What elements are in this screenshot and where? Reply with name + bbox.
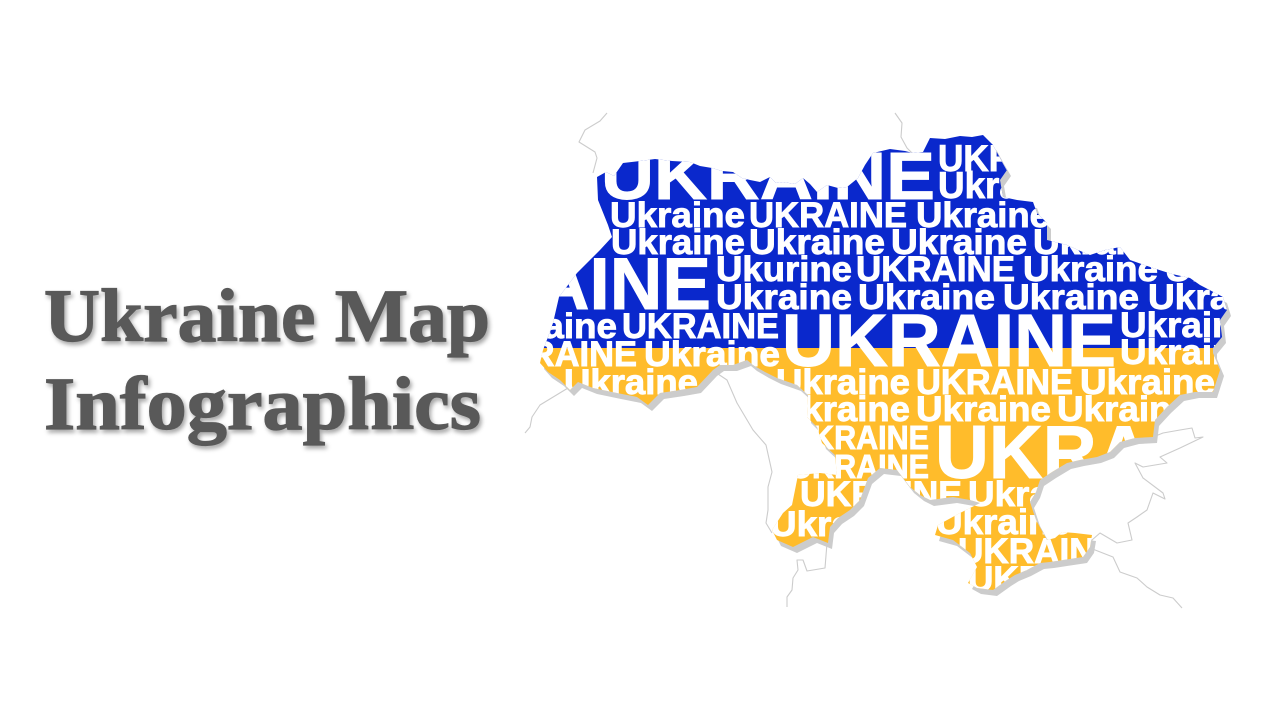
word cloud text: Ukraine [1033, 223, 1169, 262]
word cloud text: UKRAINE [935, 410, 1275, 494]
word cloud text: UKRAINE [790, 419, 929, 456]
title [44, 275, 490, 446]
word cloud text: UKRAINE [856, 250, 1015, 289]
word cloud text: Ukraine [776, 390, 910, 429]
word cloud text: UKRAINE [622, 307, 779, 346]
word cloud text: Ukraine [564, 363, 698, 402]
map shadow [544, 141, 1231, 596]
word cloud text: UKRAINE [480, 335, 637, 374]
word cloud text: UKRAINE [958, 532, 1118, 571]
word cloud text: Ukraine [891, 223, 1027, 262]
word cloud text: Ukraine [1003, 278, 1139, 317]
word cloud text: Ukraine [482, 307, 617, 346]
word cloud text: UKRAINE [800, 475, 962, 514]
yellow stripe [540, 348, 1220, 590]
word cloud text: UKRAINE [938, 138, 1098, 179]
word cloud text: UKRAINE [379, 244, 711, 325]
word cloud text: Ukraine [1120, 333, 1255, 372]
word cloud text: Ukraine [610, 196, 745, 235]
word cloud text: Ukraine [916, 196, 1050, 235]
word cloud text: Ukraine [776, 363, 910, 402]
word cloud text: Ukraine [936, 503, 1071, 542]
word cloud text: UKRAINE [601, 139, 935, 214]
title: Infographics [44, 363, 481, 446]
word cloud text: Ukraine [644, 335, 780, 374]
title: Ukraine Map [44, 275, 490, 358]
word cloud text: Ukraine [1120, 306, 1255, 345]
word cloud text: Ukraine [716, 278, 852, 317]
word cloud text: Ukurine [716, 250, 852, 289]
blue stripe [544, 135, 1227, 348]
word cloud text: Ukraine [1080, 363, 1215, 402]
word cloud text: Ukraine [611, 223, 745, 262]
word cloud text: Ukraine [1023, 250, 1158, 289]
word cloud text: Ukraine [968, 475, 1103, 514]
Ukraine map with word-cloud flag fill [540, 135, 1227, 590]
word cloud text: Ukraine [1148, 278, 1280, 317]
word cloud text [541, 144, 1227, 590]
neighbouring country borders [525, 113, 1203, 608]
word cloud text: UKRAINE [749, 196, 907, 235]
word cloud text: Ukraine [1057, 390, 1192, 429]
word cloud text: UKRAINE [790, 448, 929, 485]
word cloud text: Ukraine [770, 505, 905, 544]
word cloud text: Ukraine [916, 390, 1051, 429]
word cloud text: Ukraine [858, 278, 995, 317]
word cloud text: Ukraine [938, 165, 1073, 206]
word cloud text: Ukraine [749, 223, 885, 262]
word cloud text: UKRAINE [968, 560, 1128, 599]
word cloud text: UKRAINE [916, 363, 1073, 402]
word cloud text: UKRAINE [782, 299, 1116, 382]
